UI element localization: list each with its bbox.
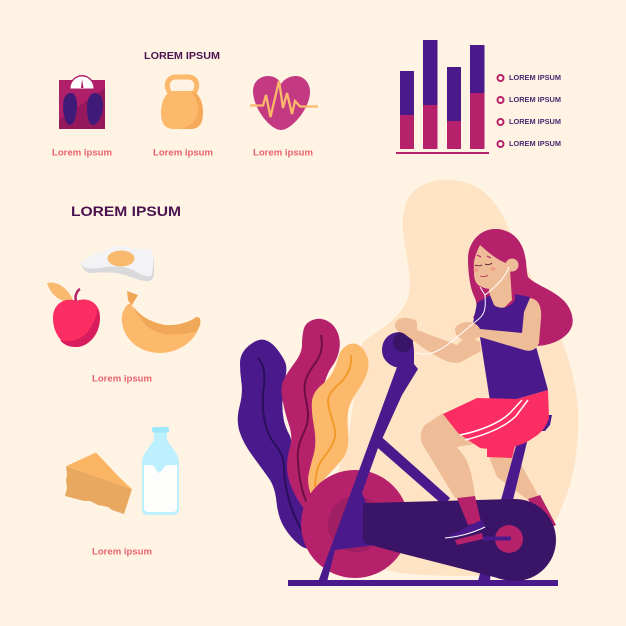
- icon: milk bottle: [142, 427, 179, 515]
- leaf: crimson: [281, 319, 340, 515]
- label: dairy: Lorem ipsum: [92, 546, 152, 558]
- hair fringe: [470, 229, 526, 263]
- chart legend: LOREM IPSUM: [509, 117, 561, 126]
- earphones: [415, 267, 509, 354]
- tank top: [473, 294, 548, 401]
- seat: [537, 415, 552, 431]
- icon: fried egg: [81, 246, 154, 281]
- neck and chest: [488, 270, 512, 309]
- shorts stripes: [460, 400, 528, 440]
- icon: kettlebell: [161, 77, 203, 129]
- main frame post: [318, 353, 418, 582]
- sock: [457, 496, 481, 525]
- chain guard: [363, 499, 556, 581]
- eyebrows: [477, 255, 491, 258]
- heading: top metrics: LOREM IPSUM: [144, 50, 220, 62]
- shorts: [443, 390, 549, 449]
- label: fruit: Lorem ipsum: [92, 374, 152, 384]
- ear: [506, 258, 518, 272]
- shorts back: [487, 442, 516, 458]
- illustration: leaves: [238, 319, 369, 549]
- mouth: [480, 275, 488, 277]
- exercise bike: back parts: [288, 332, 558, 586]
- handlebar grip: [393, 332, 413, 352]
- front leg: [421, 413, 480, 498]
- heading: food: LOREM IPSUM: [71, 203, 181, 219]
- front strut: [478, 570, 491, 581]
- icon: heart with pulse: [250, 76, 318, 130]
- rider: [395, 229, 573, 538]
- chart legend: LOREM IPSUM: [509, 139, 561, 148]
- chart legend: LOREM IPSUM: [509, 95, 561, 104]
- leaf: purple: [238, 340, 320, 549]
- chart legend: [498, 73, 561, 148]
- icon: cheese: [65, 452, 132, 514]
- near arm: [455, 298, 541, 351]
- face: [474, 240, 513, 289]
- icon: weighing scale: [59, 75, 105, 129]
- icon: banana: [122, 291, 200, 353]
- rider back leg: [487, 452, 556, 530]
- wheel: [301, 470, 409, 578]
- crank disc: [495, 525, 523, 553]
- label: heart: Lorem ipsum: [253, 148, 313, 158]
- shoe stripe: [445, 527, 485, 538]
- closed eyes: [475, 263, 492, 266]
- shoe: [445, 520, 485, 538]
- seat post: [501, 438, 528, 500]
- hair back: [468, 229, 573, 346]
- bar chart: [396, 40, 489, 154]
- leaf: orange: [308, 344, 369, 495]
- chart legend: LOREM IPSUM: [509, 73, 561, 82]
- floor bar: [288, 580, 558, 586]
- pedal: [455, 533, 483, 545]
- far arm: [395, 318, 481, 363]
- handlebar head: [382, 332, 414, 367]
- cheeks: [474, 267, 496, 272]
- icon: apple: [47, 283, 100, 347]
- label: kettlebell: Lorem ipsum: [153, 148, 213, 158]
- crank arm: [483, 536, 511, 540]
- background blob: [335, 180, 578, 576]
- frame crossbar: [371, 432, 450, 506]
- label: scale: Lorem ipsum: [52, 148, 112, 158]
